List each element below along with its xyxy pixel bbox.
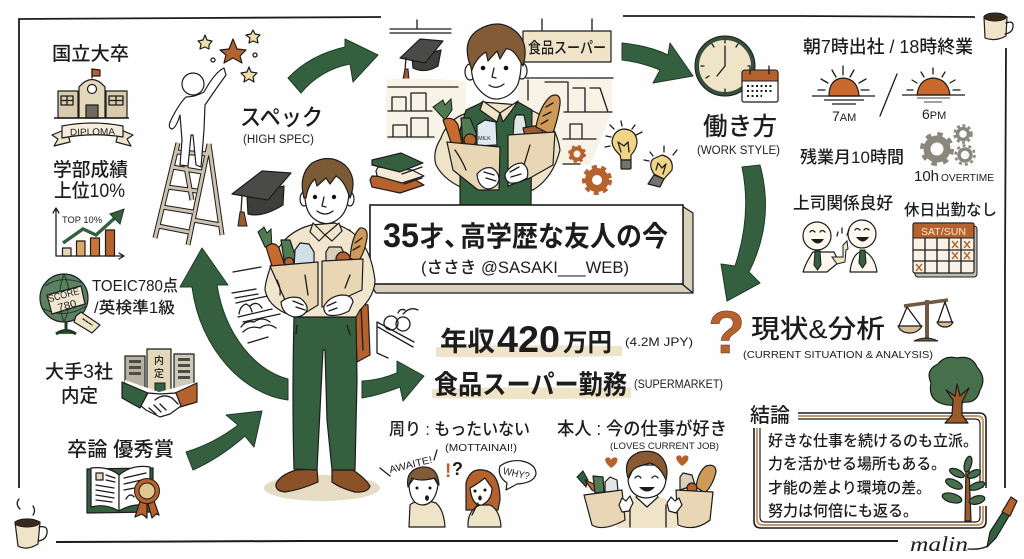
sub-element: shirt bbox=[265, 223, 375, 317]
arrow: thesis to person bbox=[186, 411, 262, 470]
signature bbox=[910, 532, 988, 556]
icon: sunset 6pm bbox=[902, 68, 965, 122]
illustration: surprised man: AWAITE! bbox=[388, 455, 434, 476]
text: working hours: 朝7時出社 / 18時終業 bbox=[803, 37, 973, 57]
text: good boss relationship: 上司関係良好 bbox=[793, 194, 893, 213]
sub-element: head bbox=[300, 158, 354, 224]
arrow: person to salary bbox=[362, 361, 424, 401]
text: current situation english: (CURRENT SITUATION & ANALYSIS) bbox=[743, 349, 933, 361]
text: salary in english: (4.2M JPY) bbox=[625, 335, 693, 349]
icon: graduation cap top bbox=[390, 20, 451, 79]
illustration: surprised man: ? bbox=[452, 459, 463, 479]
icon: weekend calendar: SAT/SUN bbox=[921, 227, 966, 238]
chart: top 10 percent bars bbox=[53, 208, 124, 259]
heading: work style: 働き方 bbox=[703, 113, 777, 141]
icon: school with diploma banner: DIPLOMA bbox=[70, 127, 116, 138]
callout: annual salary highlight bbox=[436, 319, 622, 360]
slash between sun icons bbox=[880, 74, 897, 116]
arrow: supermarket to work style bbox=[622, 43, 693, 83]
title: 才 bbox=[420, 222, 444, 252]
icon: light bulbs bbox=[605, 121, 677, 187]
icon: globe with score tag: 780 bbox=[57, 298, 78, 314]
icon: globe with score tag bbox=[40, 274, 100, 334]
icon: large gear bbox=[584, 167, 610, 193]
illustration: bread shelf left bbox=[232, 267, 280, 343]
icon: open book with rosette bbox=[87, 466, 160, 518]
heading: spec: スペック bbox=[240, 104, 323, 130]
illustration: happy man with bags bbox=[577, 451, 716, 528]
text: offers from three major firms: 大手3社 bbox=[45, 361, 113, 383]
illustration: person holding groceries top bbox=[433, 24, 560, 205]
text: conclusion lines: 努力は何倍にも返る。 bbox=[768, 502, 918, 520]
title: 高学歴な友人の今 bbox=[460, 221, 668, 252]
illustration: main person with groceries bbox=[258, 158, 380, 501]
callout: annual salary highlight: 万円 bbox=[563, 329, 612, 357]
icon: figure on ladder bbox=[155, 68, 226, 245]
text: supermarket english: (SUPERMARKET) bbox=[634, 379, 723, 391]
sub-element: left bag bbox=[577, 471, 625, 528]
sub-element: right bag bbox=[676, 465, 716, 528]
chart: top 10 percent bars: TOP 10% bbox=[62, 215, 103, 226]
callout: supermarket employment highlight: 食品スーパー勤務 bbox=[434, 370, 627, 400]
icon: buildings and handshake: 内 bbox=[154, 354, 164, 367]
icon: sunrise 7am: 7AM bbox=[832, 108, 856, 124]
sub-element: hands bbox=[281, 295, 353, 317]
icon: balance scale bbox=[898, 300, 953, 341]
title: 35 bbox=[383, 217, 419, 255]
sub-element: shoes bbox=[276, 469, 370, 492]
sub-element: baguette and bottle bbox=[513, 95, 560, 140]
text: high spec: (HIGH SPEC) bbox=[243, 134, 314, 146]
heading: conclusion: 結論 bbox=[750, 404, 790, 427]
icon: colleagues thumbs up bbox=[803, 220, 877, 272]
arrow: spec to supermarket bbox=[288, 39, 378, 93]
sub-element: vegetables and milk bbox=[433, 99, 497, 146]
icon: stars bbox=[198, 30, 260, 82]
sub-element: vegetables and milk: MILK bbox=[478, 136, 491, 142]
text: top 10 percent: 上位10% bbox=[54, 180, 125, 202]
sub-element: shadow bbox=[264, 475, 380, 501]
text: offers from three major firms: 内定 bbox=[61, 385, 98, 407]
icon: sunset 6pm: 6PM bbox=[922, 106, 946, 122]
icon: small tree bbox=[941, 455, 988, 521]
text: monthly overtime: 残業月10時間 bbox=[800, 147, 904, 167]
panel: conclusion box bbox=[750, 404, 986, 528]
text: Eiken grade: /英検準1級 bbox=[94, 299, 175, 317]
sub-element: groceries left bbox=[258, 227, 318, 313]
arrow: large arc up to spec bbox=[180, 248, 288, 400]
icon: small gear bbox=[570, 146, 584, 162]
callout: why speech bubble: WHY? bbox=[502, 466, 531, 483]
signature: malin bbox=[910, 532, 968, 556]
text: mottainai english: (MOTTAINAI!) bbox=[445, 442, 517, 454]
icon: globe with score tag: SCORE bbox=[47, 286, 81, 305]
callout: annual salary highlight: 420 bbox=[497, 319, 560, 360]
text: faculty grades: 学部成績 bbox=[53, 159, 128, 181]
text: offers from three major firms bbox=[45, 361, 113, 407]
illustration: surprised man bbox=[380, 450, 463, 527]
icon: coffee cup bottom left bbox=[15, 499, 47, 548]
text: conclusion lines: 力を活かせる場所もある。 bbox=[768, 455, 946, 473]
sub-element: messenger bag bbox=[344, 230, 370, 362]
text: loves current job english: (LOVES CURRENT JOB) bbox=[610, 441, 719, 452]
text: thesis award: 卒論 優秀賞 bbox=[67, 438, 174, 461]
icon: store sign: 食品スーパー bbox=[528, 39, 606, 57]
text: 10h overtime bbox=[914, 168, 994, 185]
sub-element: groceries right bbox=[322, 228, 367, 307]
icon: buildings and handshake: 定 bbox=[154, 368, 164, 380]
heading: national university: 国立大卒 bbox=[52, 43, 129, 65]
icon: pen bbox=[987, 497, 1017, 547]
text: conclusion lines: 才能の差より環境の差。 bbox=[768, 479, 931, 497]
icon: sunrise 7am bbox=[812, 66, 875, 124]
text: work style english: (WORK STYLE) bbox=[697, 145, 780, 157]
icon: gears bbox=[922, 126, 974, 164]
icon: large tree bbox=[929, 357, 983, 423]
icon: store sign bbox=[523, 19, 611, 62]
icon: buildings and handshake bbox=[122, 349, 197, 417]
icon: weekend calendar bbox=[913, 223, 977, 277]
icon: shelves left bbox=[386, 78, 466, 140]
panel: title plate bbox=[370, 205, 693, 293]
icon: shelves right bbox=[518, 78, 613, 165]
sub-element: trousers bbox=[293, 317, 357, 470]
text: TOEIC score: TOEIC780点 bbox=[92, 277, 178, 295]
icon: question mark: ? bbox=[708, 299, 745, 366]
text: no holiday work: 休日出勤なし bbox=[904, 201, 997, 219]
heading: current situation and analysis: 現状&分析 bbox=[751, 314, 885, 344]
callout: annual salary highlight: 年収 bbox=[440, 327, 495, 357]
subtitle: (ささき @SASAKI___WEB) bbox=[421, 258, 629, 277]
icon: stack of books bbox=[370, 153, 424, 193]
illustration: surprised woman bbox=[466, 470, 501, 527]
illustration: produce stand right bbox=[377, 309, 418, 358]
text: 10h overtime: 10h bbox=[914, 168, 939, 185]
icon: graduation cap left bbox=[232, 171, 291, 226]
arrow: work style to analysis bbox=[721, 165, 765, 301]
illustration: surprised man: ! bbox=[445, 461, 451, 482]
callout: why speech bubble bbox=[499, 461, 536, 490]
text: conclusion lines bbox=[768, 432, 978, 520]
icon: coffee cup top right bbox=[984, 13, 1013, 40]
icon: clock and calendar bbox=[695, 36, 778, 102]
text: self loves job: 本人 : 今の仕事が好き bbox=[557, 418, 727, 439]
title: 、 bbox=[444, 222, 471, 252]
text: 10h overtime: OVERTIME bbox=[941, 172, 994, 184]
text: conclusion lines: 好きな仕事を続けるのも立派。 bbox=[768, 432, 978, 450]
title bbox=[383, 217, 668, 255]
icon: school with diploma banner bbox=[52, 69, 133, 146]
text: others say wasteful: 周り : もったいない bbox=[389, 420, 530, 439]
